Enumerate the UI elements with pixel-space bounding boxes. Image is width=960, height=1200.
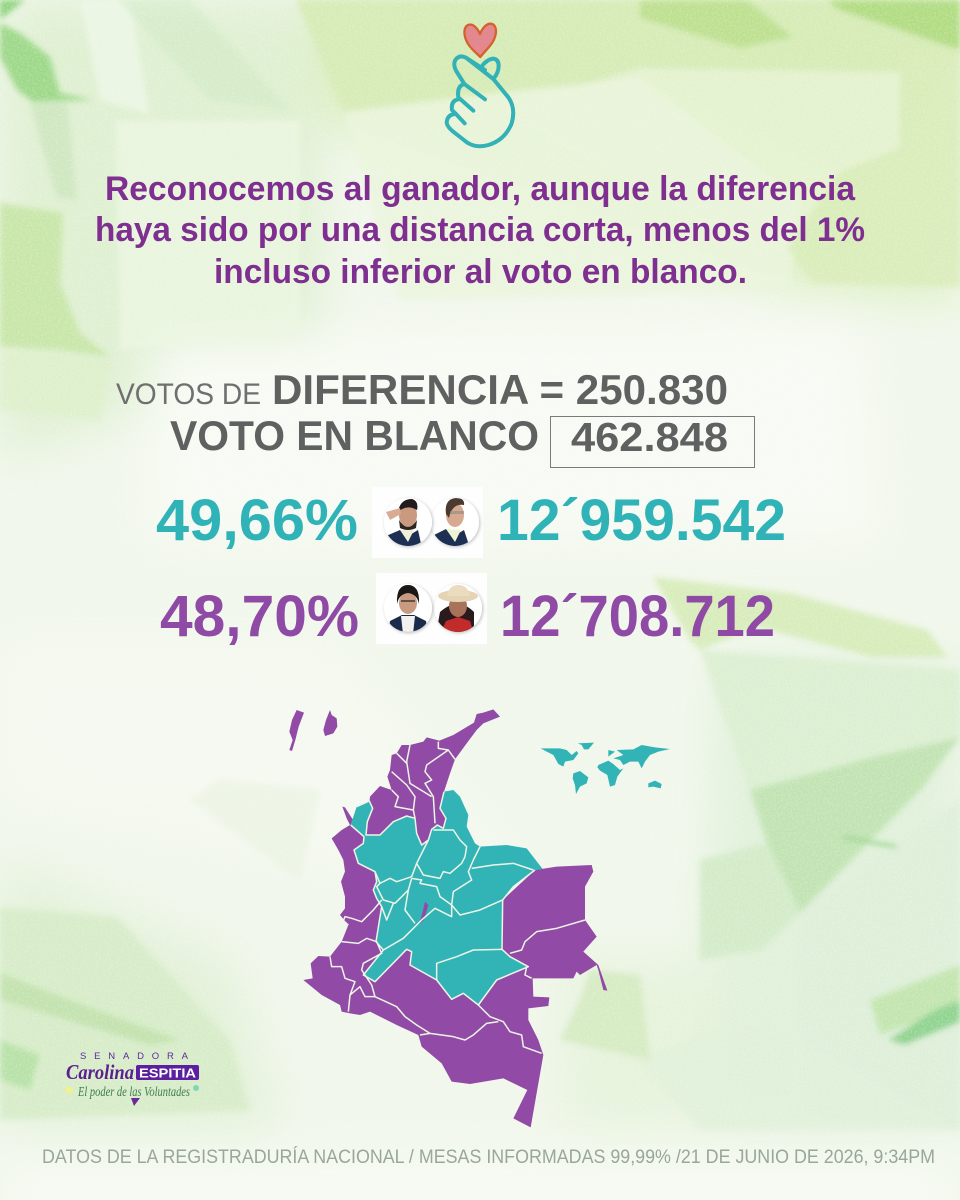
north departments: purple (366, 709, 500, 845)
blank vote line: 462.848 (571, 414, 728, 460)
logo: Senadora Carolina Espitia: El poder de las Voluntades (77, 1085, 190, 1100)
logo: Senadora Carolina Espitia (66, 1051, 199, 1106)
result row: teal ticket (156, 487, 786, 558)
blank vote line (170, 412, 754, 468)
icon: heart (464, 24, 496, 57)
southern borders (330, 900, 585, 1053)
central departments: teal (351, 790, 543, 1005)
department borders (330, 742, 585, 1053)
heading: haya sido por una distancia corta, menos del 1% (95, 211, 865, 249)
result row: purple ticket (160, 573, 775, 649)
icon: hand (447, 56, 513, 146)
result row: purple ticket: 12´708.712 (500, 584, 775, 649)
map of Colombia by winner (289, 709, 607, 1127)
Bogota (419, 902, 428, 924)
portraits: purple ticket (376, 573, 487, 644)
heading: Reconocemos al ganador, aunque la diferencia (105, 170, 856, 208)
heading: incluso inferior al voto en blanco. (214, 253, 747, 291)
result row: teal ticket: 49,66% (156, 488, 358, 553)
result row: purple ticket: 48,70% (160, 584, 359, 649)
logo badge (136, 1065, 199, 1080)
portraits: teal ticket (372, 487, 483, 558)
result row: teal ticket: 12´959.542 (497, 488, 786, 553)
world map (541, 743, 670, 794)
south and east departments: purple (303, 807, 607, 1127)
blank vote box (550, 416, 754, 468)
heading (95, 170, 865, 291)
icon: finger heart (447, 24, 513, 146)
blank vote line: VOTO EN BLANCO (170, 412, 539, 459)
vote difference line: DIFERENCIA = 250.830 (272, 366, 728, 413)
logo: Senadora Carolina Espitia: Carolina (66, 1060, 134, 1084)
logo: Senadora Carolina Espitia: ESPITIA (139, 1066, 197, 1080)
vote difference line: VOTOS DE (116, 378, 261, 411)
logo: Senadora Carolina Espitia: SENADORA (80, 1051, 189, 1062)
islands (289, 710, 337, 751)
